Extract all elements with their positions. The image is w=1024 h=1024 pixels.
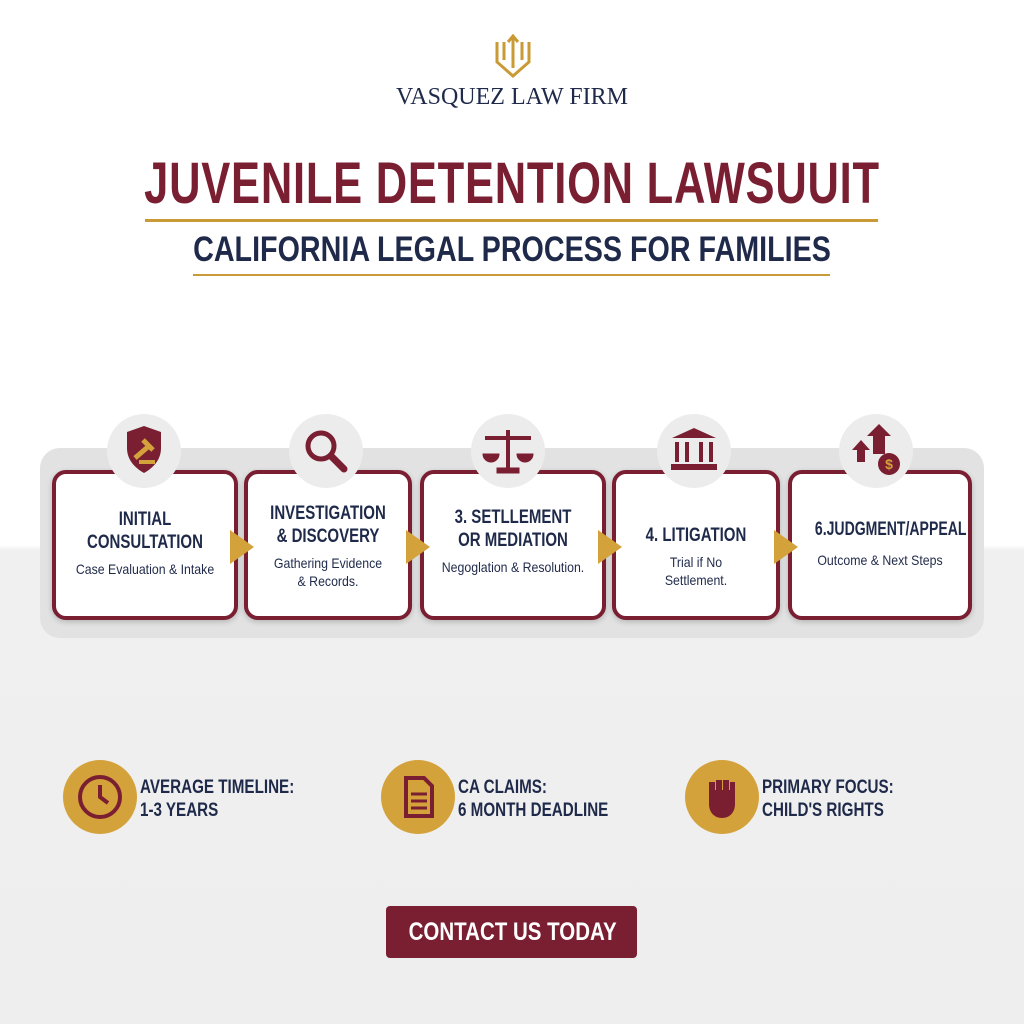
text: 1-3 YEARS: [140, 800, 218, 821]
step 3: Negoglation & Resolution.: [442, 559, 584, 575]
step 5: 6.JUDGMENT/APPEAL: [815, 519, 966, 540]
icon: money growth: [839, 414, 913, 488]
step 1: CONSULTATION: [87, 532, 203, 553]
stat: focus: [685, 760, 894, 834]
icon: money growth: $: [885, 456, 893, 472]
stat: timeline: [63, 760, 294, 834]
step 4: Trial if No: [670, 554, 722, 570]
step 1: Case Evaluation & Intake: [76, 561, 214, 577]
stat: claims: [381, 760, 608, 834]
step 3: OR MEDIATION: [458, 530, 568, 551]
icon: shield gavel: [107, 414, 181, 488]
step 3: [420, 470, 606, 620]
arrows: [230, 530, 798, 564]
text: CHILD'S RIGHTS: [762, 800, 884, 821]
step 2: & DISCOVERY: [277, 526, 379, 547]
contact button: [386, 906, 637, 958]
step 1: INITIAL: [119, 509, 171, 530]
text: 6 MONTH DEADLINE: [458, 800, 608, 821]
text: CA CLAIMS:: [458, 777, 547, 798]
subtitle: CALIFORNIA LEGAL PROCESS FOR FAMILIES: [193, 230, 831, 269]
step 2: [244, 470, 412, 620]
step 1: [52, 470, 238, 620]
step 5: [788, 470, 972, 620]
step 2: Gathering Evidence: [274, 555, 382, 571]
step 5: Outcome & Next Steps: [817, 552, 943, 568]
brand name: VASQUEZ LAW FIRM: [396, 84, 628, 110]
step 2: INVESTIGATION: [270, 503, 386, 524]
icon: magnifier: [289, 414, 363, 488]
icon: scales: [471, 414, 545, 488]
step 2: & Records.: [298, 573, 358, 589]
icon: courthouse: [657, 414, 731, 488]
text: AVERAGE TIMELINE:: [140, 777, 294, 798]
contact button: CONTACT US TODAY: [409, 918, 617, 946]
step 4: [612, 470, 780, 620]
process track: [40, 448, 984, 638]
title: JUVENILE DETENTION LAWSUUIT: [144, 151, 880, 216]
text: PRIMARY FOCUS:: [762, 777, 894, 798]
logo icon: [496, 34, 530, 78]
step 3: 3. SETLLEMENT: [455, 507, 571, 528]
step 4: 4. LITIGATION: [646, 525, 746, 546]
step 4: Settlement.: [665, 572, 727, 588]
